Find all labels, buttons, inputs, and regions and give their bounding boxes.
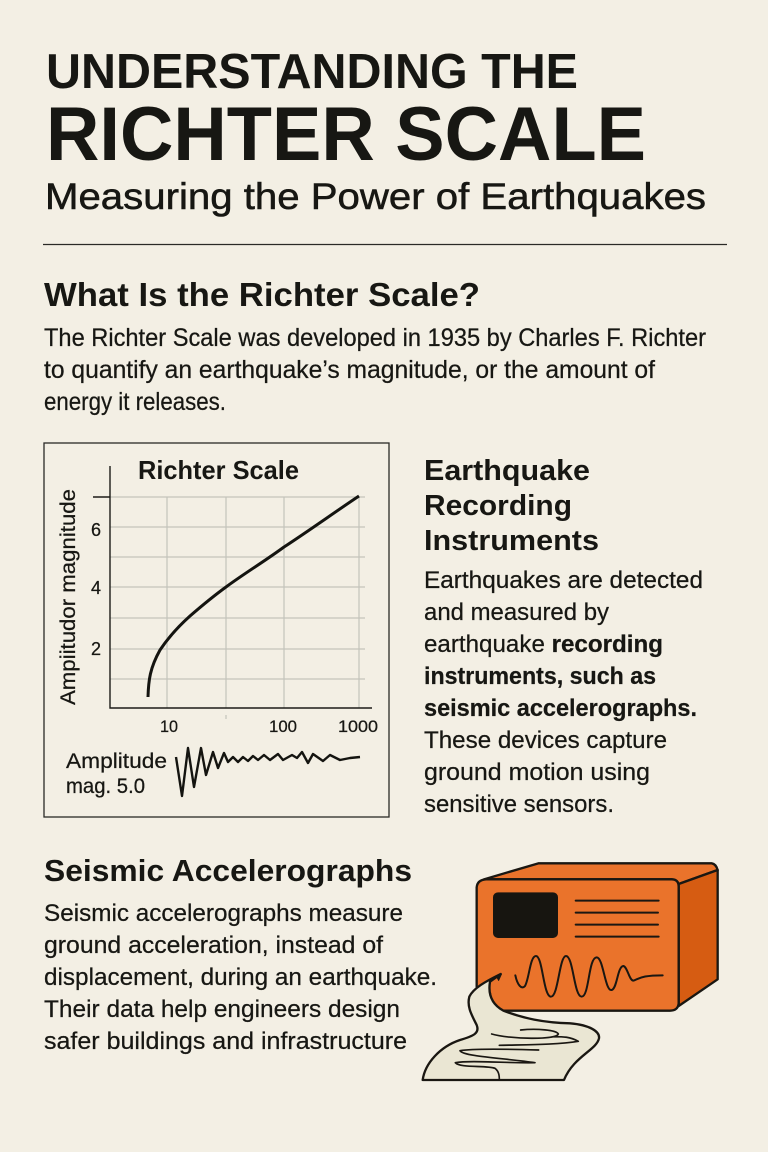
text block: recording instruments: earthquake recording (424, 631, 663, 658)
text block: recording instruments: Earthquakes are detected (424, 567, 703, 594)
text block: richter scale definition (44, 324, 706, 416)
device front (477, 879, 679, 1011)
chart grid (110, 497, 365, 719)
x axis ticks: 10 (160, 717, 178, 736)
heading: earthquake recording instruments: Recording (424, 490, 572, 522)
amplitude label: mag. 5.0 (66, 775, 145, 798)
magnitude curve (148, 496, 359, 697)
text block: seismic accelerographs: safer buildings and infrastructure (44, 1028, 407, 1055)
amplitude label (66, 750, 167, 798)
chart title: Richter Scale (138, 455, 299, 485)
y axis ticks: 2 (91, 639, 101, 659)
text block: recording instruments (424, 567, 703, 818)
text block: richter scale definition: to quantify an earthquake’s magnitude, or the amount of (44, 356, 655, 384)
seismic waveform (176, 748, 360, 796)
device top (484, 863, 718, 884)
icon: seismic accelerograph device (423, 863, 718, 1080)
title (45, 45, 706, 217)
chart axes (93, 466, 372, 708)
text block: recording instruments: instruments, such as (424, 663, 656, 690)
text block: richter scale definition: The Richter Scale was developed in 1935 by Charles F. Richter (44, 324, 706, 352)
paper strip (423, 974, 599, 1080)
heading: earthquake recording instruments: Instruments (424, 525, 599, 557)
text block: seismic accelerographs: Their data help engineers design (44, 996, 400, 1023)
y axis ticks: 6 (91, 520, 101, 540)
text block: seismic accelerographs (44, 900, 437, 1055)
device text lines (576, 901, 659, 937)
text block: recording instruments: sensitive sensors. (424, 791, 614, 818)
title: RICHTER SCALE (46, 92, 646, 177)
paper tip (496, 974, 502, 981)
text block: seismic accelerographs: Seismic accelerographs measure (44, 900, 403, 927)
panel: richter scale chart (44, 443, 389, 817)
y axis ticks (91, 520, 101, 659)
device waveform (515, 956, 663, 997)
title: Measuring the Power of Earthquakes (45, 175, 706, 217)
text block: seismic accelerographs: displacement, during an earthquake. (44, 964, 437, 991)
x axis ticks: 1000 (338, 717, 378, 736)
y axis ticks: 4 (91, 578, 101, 598)
y axis label: Ampiitudor magnitude (57, 489, 80, 705)
text block: seismic accelerographs: ground acceleration, instead of (44, 932, 383, 959)
paper trace lines (455, 1029, 578, 1080)
heading: what is the richter scale: What Is the Richter Scale? (44, 276, 480, 313)
amplitude label: Amplitude (66, 750, 167, 773)
text block: recording instruments: seismic accelerographs. (424, 695, 697, 722)
title: UNDERSTANDING THE (46, 45, 578, 99)
text block: recording instruments: and measured by (424, 599, 610, 626)
device screen (493, 893, 558, 938)
x axis ticks (160, 717, 378, 736)
heading: earthquake recording instruments: Earthquake (424, 455, 590, 487)
heading: earthquake recording instruments (424, 455, 599, 557)
text block: recording instruments: These devices capture (424, 727, 667, 754)
device side (679, 870, 718, 1006)
text block: richter scale definition: energy it releases. (44, 388, 226, 416)
x axis ticks: 100 (269, 717, 297, 736)
heading: seismic accelerographs: Seismic Accelerographs (44, 853, 412, 888)
text block: recording instruments: ground motion using (424, 759, 650, 786)
